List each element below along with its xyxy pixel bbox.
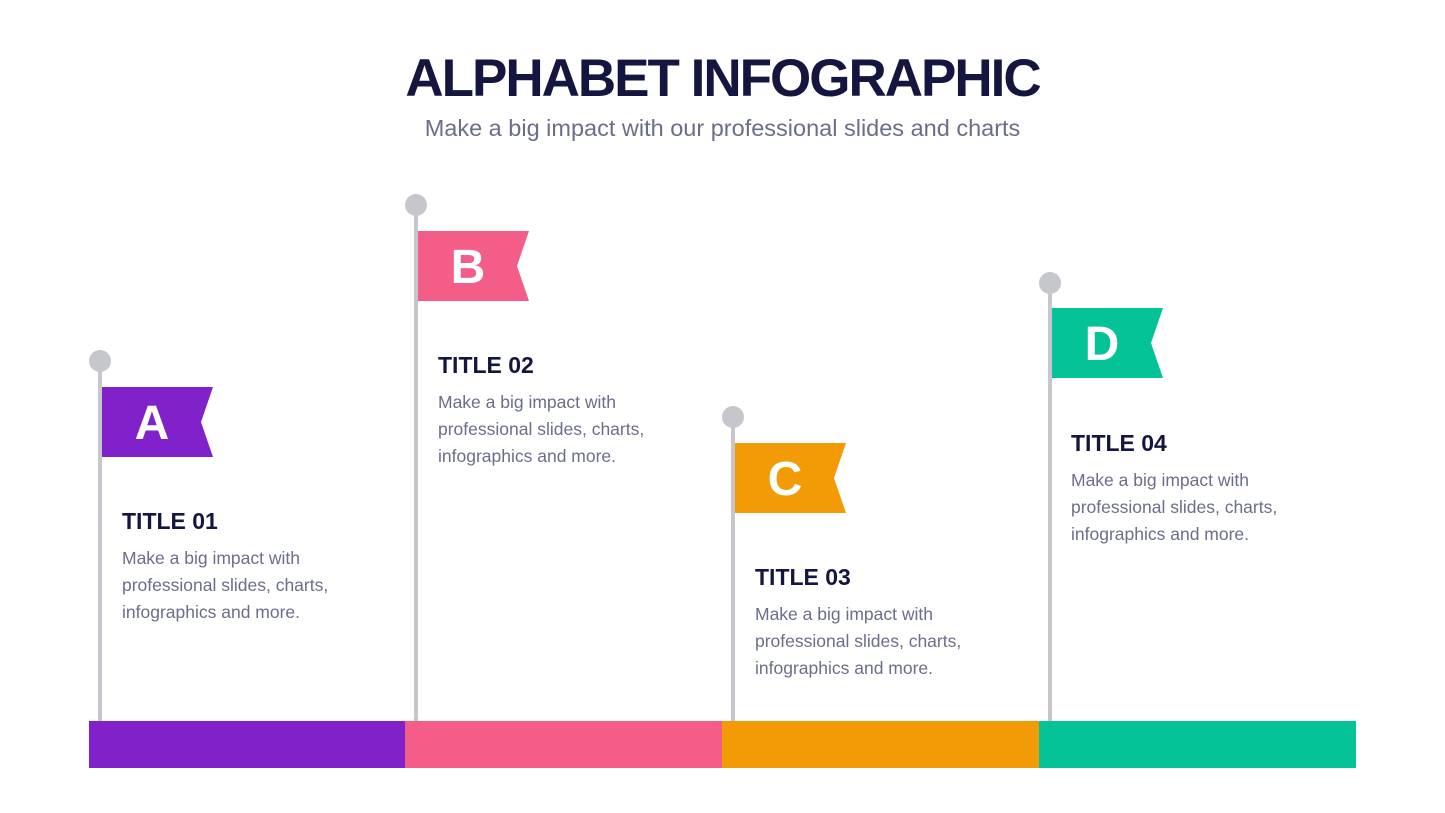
flag C: C [768,453,802,506]
text block 02: TITLE 02 [438,352,534,378]
flag B [405,194,529,721]
title: ALPHABET INFOGRAPHIC [405,49,1040,108]
bottom bar [89,721,1356,768]
flag C [722,406,846,721]
text block 04: TITLE 04 [1071,430,1167,456]
text block 04 [1071,430,1277,544]
text block 01: TITLE 01 [122,508,218,534]
flag D [1039,272,1163,721]
text block 03: TITLE 03 [755,564,851,590]
text block 03: Make a big impact with professional slides, charts, infographics and more. [755,604,961,678]
text block 01 [122,508,328,622]
text block 04: Make a big impact with professional slides, charts, infographics and more. [1071,470,1277,544]
text block 01: Make a big impact with professional slides, charts, infographics and more. [122,548,328,622]
text block 02 [438,352,644,466]
flag B: B [451,241,485,294]
flag A: A [135,397,169,450]
flag D: D [1085,318,1119,371]
text block 02: Make a big impact with professional slides, charts, infographics and more. [438,392,644,466]
flag A [89,350,213,721]
text block 03 [755,564,961,678]
subtitle: Make a big impact with our professional slides and charts [425,115,1020,141]
